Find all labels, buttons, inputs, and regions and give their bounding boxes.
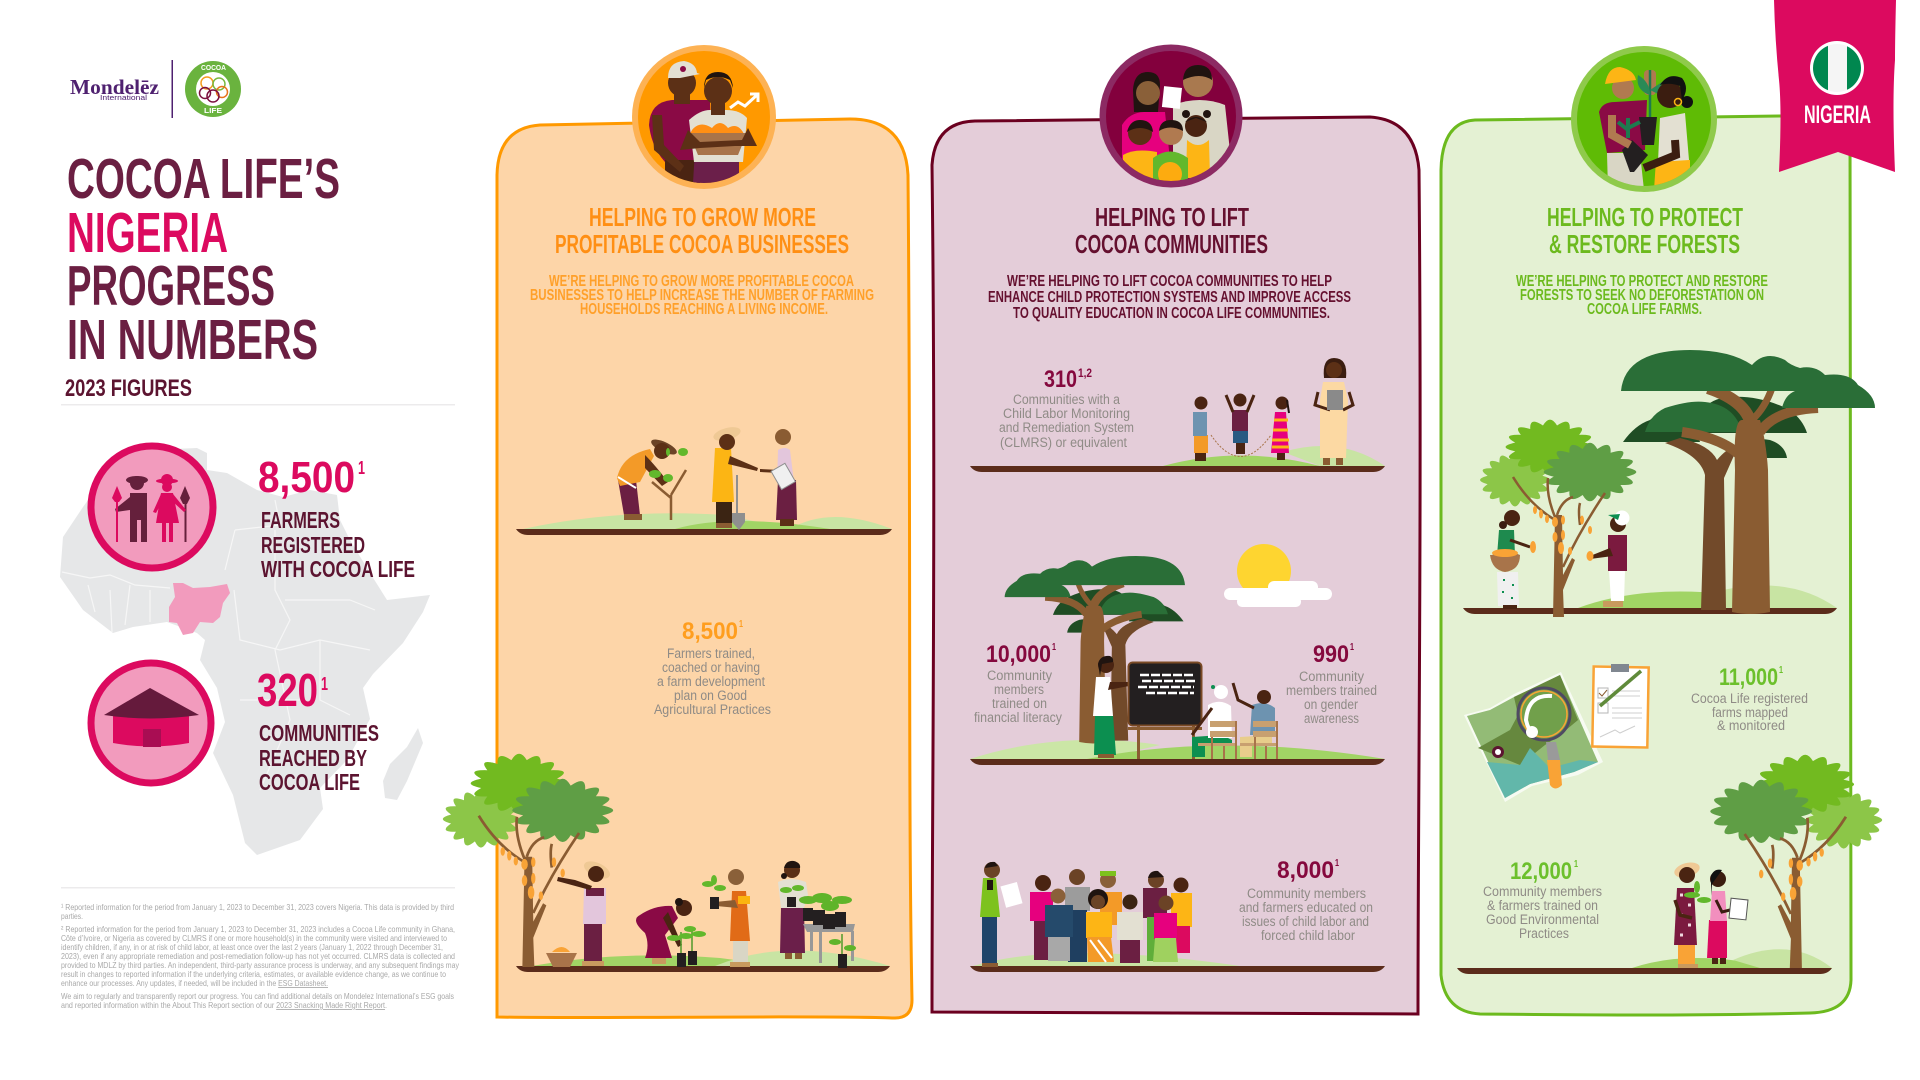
label: communities reached (259, 720, 379, 795)
stat: child labor education: forced child labor (1261, 928, 1355, 943)
title: PROGRESS (67, 254, 275, 318)
stat: farms mapped (1691, 664, 1808, 733)
map of Africa with Nigeria highlighted (60, 448, 430, 855)
description: ENHANCE CHILD PROTECTION SYSTEMS AND IMPROVE ACCESS (988, 289, 1351, 306)
heading: & RESTORE FORESTS (1549, 229, 1740, 259)
cocoa tree (443, 754, 613, 967)
stat: CLMRS communities: 310 (1044, 366, 1077, 393)
number: 8,500: 1 (358, 458, 365, 478)
illustration: baobab classroom (970, 544, 1385, 765)
stat: environmental training: & farmers trained on (1487, 898, 1598, 913)
stat: financial literacy: Community (987, 668, 1052, 683)
woman with seedling (1673, 860, 1711, 968)
basket of pods (546, 947, 577, 967)
stat: farms mapped: 1 (1779, 665, 1783, 676)
stat: farms mapped: farms mapped (1712, 705, 1788, 720)
stat: child labor education: Community members (1247, 886, 1366, 901)
stat: CLMRS communities: 1,2 (1078, 366, 1092, 380)
stat: farmers trained: coached or having (662, 660, 760, 675)
teacher (1093, 656, 1129, 758)
stat: CLMRS communities: Child Labor Monitoring (1003, 406, 1130, 421)
child skipping 2 (1226, 394, 1254, 454)
stat: financial literacy: members (994, 682, 1044, 697)
footnotes: We aim to regularly and transparently report our progress. You can find additional details on Mondelez International’s ESG goals (61, 991, 454, 1001)
footnotes: and reported information within the About This Report section of our 2023 Snacking Made Right Report. (61, 1000, 387, 1010)
footnotes: identify children, if any, in or at risk of child labor, at least once over the last 2 years (January 1, 2022 through December 31, (61, 942, 443, 952)
stat: gender awareness: members trained (1286, 683, 1377, 698)
title: COCOA LIFE’S (67, 147, 340, 211)
icon: hut badge (91, 663, 211, 783)
heading: PROFITABLE COCOA BUSINESSES (555, 229, 849, 259)
panel background: orange (496, 119, 912, 1018)
stat: environmental training: Community members (1483, 884, 1602, 899)
description: BUSINESSES TO HELP INCREASE THE NUMBER OF FARMING (530, 287, 874, 304)
stat: farms mapped: 11,000 (1719, 664, 1778, 691)
stat: environmental training (1483, 858, 1602, 941)
heading (1547, 202, 1743, 259)
description: WE’RE HELPING TO PROTECT AND RESTORE (1516, 273, 1768, 290)
stat: gender awareness: 1 (1350, 642, 1354, 653)
panel: grow profitable cocoa businesses (443, 45, 912, 1018)
footnotes: Côte d’Ivoire, or Nigeria as covered by CLMRS if one or more household(s) in the community were visited and interviewed to (61, 933, 447, 943)
footnotes: parties. (61, 911, 83, 921)
stat: farms mapped: & monitored (1717, 718, 1785, 733)
description: HOUSEHOLDS REACHING A LIVING INCOME. (580, 301, 828, 318)
description: FORESTS TO SEEK NO DEFORESTATION ON (1520, 287, 1764, 304)
farmer harvesting (557, 858, 613, 966)
stat: child labor education: 8,000 (1277, 857, 1334, 884)
woman with basket (1490, 510, 1536, 609)
cocoa tree (1710, 755, 1882, 968)
stat: farms mapped: Cocoa Life registered (1691, 691, 1808, 706)
description (530, 273, 874, 318)
stat: farmers registered (91, 446, 415, 582)
stat: environmental training: 1 (1574, 859, 1578, 870)
logo: Cocoa Life: LIFE (204, 108, 222, 115)
stat: farmers trained: a farm development (657, 674, 765, 689)
icon: planting couple (1571, 46, 1717, 192)
heading (1075, 202, 1268, 259)
footnotes: 2023), even if any appropriate remediation and post-remediation follow-up has not yet occurred. CLMRS data is collected and (61, 951, 455, 961)
woman planting (636, 898, 692, 964)
child skipping 1 (1193, 396, 1208, 461)
stat: CLMRS communities (999, 366, 1134, 450)
label: communities reached: REACHED BY (259, 745, 367, 771)
stat: farmers trained (654, 618, 771, 717)
panel background: green (1441, 116, 1851, 1015)
heading: HELPING TO LIFT (1095, 202, 1249, 232)
description: WE’RE HELPING TO GROW MORE PROFITABLE COCOA (549, 273, 854, 290)
cocoa tree (1480, 420, 1636, 617)
stat: farmers trained: plan on Good (674, 688, 747, 703)
stat: child labor education: issues of child labor and (1242, 914, 1369, 929)
description: WE’RE HELPING TO LIFT COCOA COMMUNITIES TO HELP (1007, 273, 1332, 290)
stat: environmental training: 12,000 (1510, 858, 1572, 885)
title: NIGERIA (67, 201, 228, 265)
map (1464, 672, 1603, 802)
heading: HELPING TO PROTECT (1547, 202, 1743, 232)
label: farmers registered: REGISTERED (261, 532, 365, 558)
illustration: forest and cocoa tree (1463, 350, 1875, 617)
illustration: women with cocoa tree (1457, 755, 1882, 974)
stat: child labor education: and farmers educated on (1239, 900, 1373, 915)
man holding seedling (702, 869, 750, 967)
sun and cloud (1224, 544, 1332, 607)
illustration: farmers shaking hands (516, 425, 892, 535)
number: 320: 1 (321, 674, 328, 694)
footnotes: ² Reported information for the period from January 1, 2023 to December 31, 2023 includes a Cocoa Life community in Ghana, (61, 924, 455, 934)
presenter (980, 862, 1023, 967)
stat: environmental training: Good Environmental (1486, 912, 1599, 927)
logo: Mondelez International: International (100, 93, 147, 102)
number: 320: 320 (257, 664, 318, 716)
students on chairs (1192, 683, 1278, 759)
baobab tree (1621, 350, 1875, 614)
logo: Cocoa Life: COCOA (201, 65, 226, 72)
description: TO QUALITY EDUCATION IN COCOA LIFE COMMUNITIES. (1013, 305, 1330, 322)
stat: child labor education: 1 (1335, 858, 1339, 869)
stat: farmers trained: Farmers trained, (667, 646, 755, 661)
seedling table (799, 893, 856, 968)
woman with seedlings (778, 861, 808, 959)
heading: COCOA COMMUNITIES (1075, 229, 1268, 259)
illustration: children and teacher (970, 358, 1385, 472)
farmer planting (617, 437, 679, 520)
heading (555, 202, 849, 259)
man with pod (1586, 510, 1630, 607)
panel: protect and restore forests (1441, 46, 1882, 1015)
stat: environmental training: Practices (1519, 926, 1569, 941)
icon: Nigerian flag (1810, 41, 1864, 95)
seated and standing crowd (1030, 869, 1192, 963)
logo: Mondelez International: Mondelēz (70, 75, 159, 99)
icon: farmers badge (91, 446, 213, 568)
illustration: map and clipboard (1464, 664, 1649, 802)
magnifying glass (1518, 688, 1570, 788)
footnotes: enhance our processes. Any updates, if needed, will be included in the ESG Datasheet. (61, 978, 328, 988)
logo: Cocoa Life (185, 61, 241, 117)
label: Nigeria: NIGERIA (1804, 101, 1871, 129)
stat: farmers trained: 1 (739, 619, 743, 630)
woman with clipboard (1707, 870, 1748, 964)
child skipping 3 (1271, 396, 1289, 460)
footnotes (61, 902, 460, 1010)
icon: farming couple (632, 45, 776, 190)
title (67, 147, 340, 372)
stat: child labor education (1239, 857, 1373, 943)
icon: family (1100, 44, 1242, 188)
sapling (649, 448, 688, 520)
label: communities reached: COMMUNITIES (259, 720, 379, 746)
panel: lift cocoa communities (932, 44, 1420, 1014)
number: 8,500: 8,500 (258, 453, 355, 502)
stat: financial literacy (974, 641, 1062, 725)
logo: Mondelez International (70, 60, 173, 118)
subtitle: 2023 figures: 2023 FIGURES (65, 375, 192, 402)
stat: financial literacy: financial literacy (974, 710, 1062, 725)
stat: gender awareness: 990 (1313, 641, 1349, 668)
illustration: community group (970, 862, 1385, 972)
ribbon: Nigeria (1774, 0, 1896, 172)
stat: financial literacy: 10,000 (986, 641, 1051, 668)
farmer with shovel (712, 425, 758, 530)
stat: gender awareness (1286, 641, 1377, 726)
baobab tree (1005, 556, 1185, 743)
footnotes: ¹ Reported information for the period from January 1, 2023 to December 31, 2023 covers Nigeria. This data is provided by third (61, 902, 454, 912)
heading: HELPING TO GROW MORE (589, 202, 816, 232)
stat: gender awareness: awareness (1304, 711, 1359, 726)
footnotes: provided to MDLZ by third parties. An independent, third-party assurance process is underway, and any subsequent findings may (61, 960, 460, 970)
title: IN NUMBERS (67, 308, 318, 372)
clipboard (1592, 664, 1649, 747)
description (988, 273, 1351, 322)
stat: CLMRS communities: (CLMRS) or equivalent (1000, 435, 1127, 450)
label: farmers registered (261, 507, 415, 582)
stat: farmers trained: 8,500 (682, 618, 738, 645)
label: communities reached: COCOA LIFE (259, 769, 360, 795)
panel background: mauve (932, 117, 1420, 1014)
seedlings (667, 926, 706, 967)
jump rope (1211, 435, 1271, 456)
description (1516, 273, 1768, 318)
stat: financial literacy: trained on (992, 696, 1047, 711)
description: COCOA LIFE FARMS. (1587, 301, 1702, 318)
stat: farmers trained: Agricultural Practices (654, 702, 771, 717)
stat: gender awareness: Community (1299, 669, 1364, 684)
farmer with clipboard (760, 429, 797, 526)
teacher with tablet (1315, 358, 1353, 465)
stat: gender awareness: on gender (1304, 697, 1358, 712)
stat: financial literacy: 1 (1052, 642, 1056, 653)
label: farmers registered: WITH COCOA LIFE (261, 556, 415, 582)
label: farmers registered: FARMERS (261, 507, 340, 533)
stat: CLMRS communities: and Remediation System (999, 420, 1134, 435)
footnotes: result in changes to reported information if the underlying criteria, estimates, or available evidence change, as we continue to (61, 969, 446, 979)
illustration: cocoa tree and seedlings (443, 754, 890, 972)
stat: CLMRS communities: Communities with a (1013, 392, 1120, 407)
blackboard (1128, 662, 1202, 759)
stat: communities reached (91, 663, 379, 795)
